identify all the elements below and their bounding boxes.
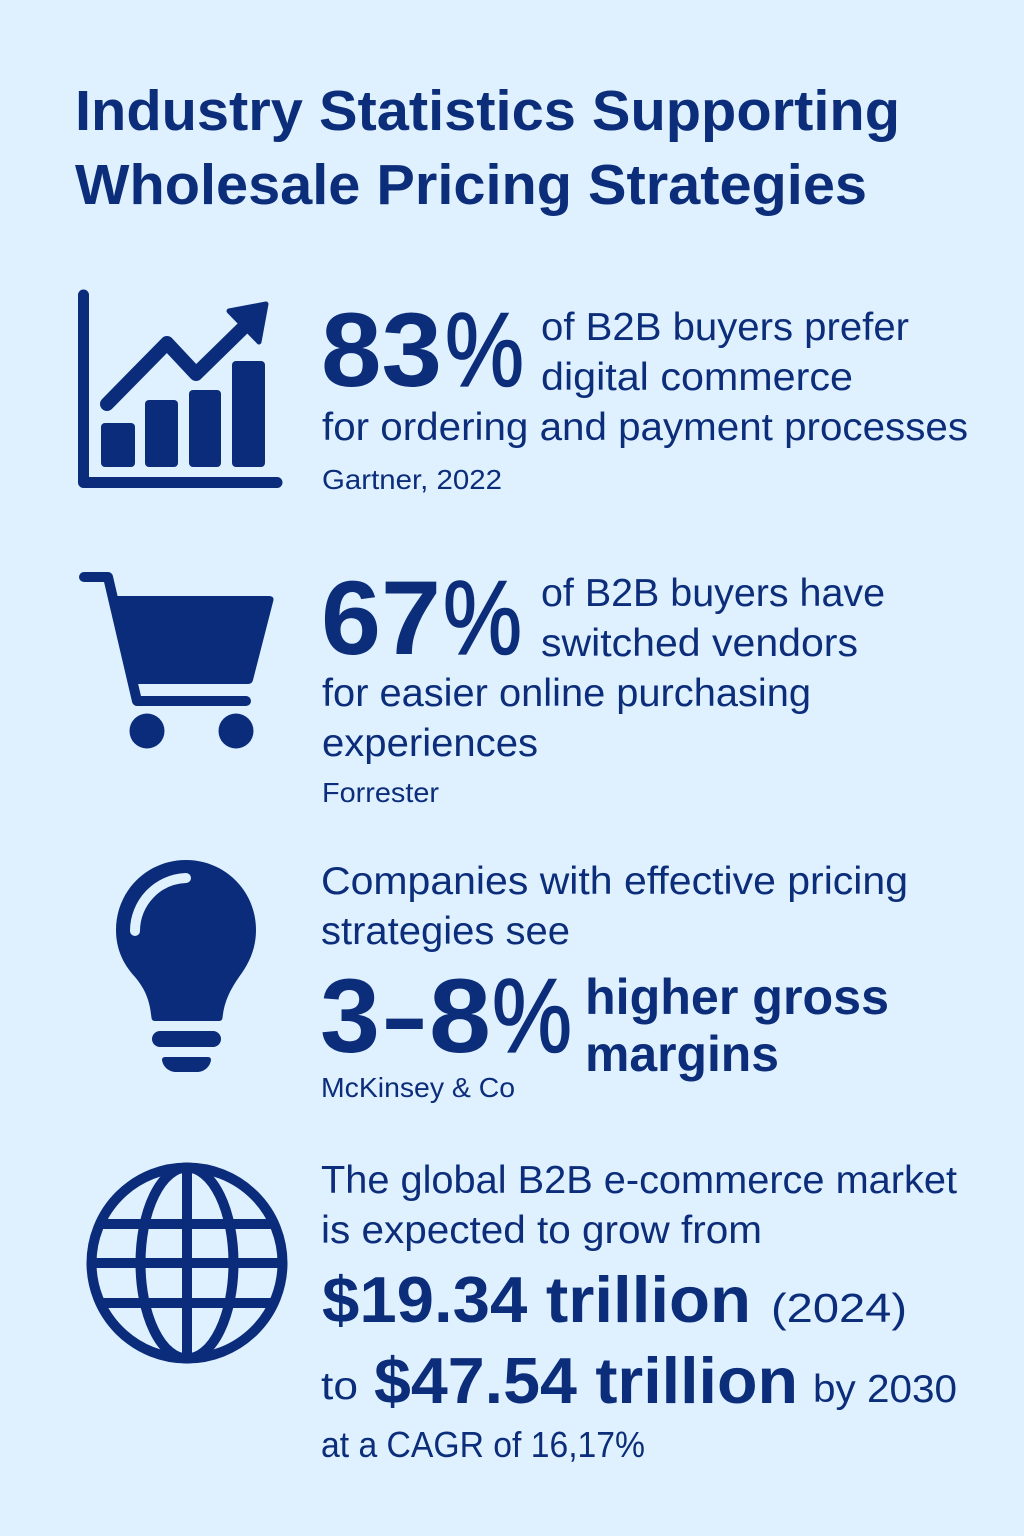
icon: globe [92,1168,282,1358]
statistic: 2030 market size: $47.54 trillion [374,1344,798,1417]
statistic: 2030 market size: to [321,1365,358,1408]
statistic: 83%: % [445,292,524,409]
title [75,79,900,217]
text: digital commerce description: digital commerce [541,356,853,399]
statistic: 3–8%: – [384,958,425,1075]
statistic: 67% [321,560,522,677]
text: market introduction [321,1159,957,1252]
statistic: 3–8%: 3 [320,958,380,1075]
text: digital commerce description: for ordering and payment processes [322,406,968,449]
statistic: 67%: % [443,560,522,677]
panel: vendor switching statistic [84,560,885,808]
text: vendor switching description: experiences [322,722,538,765]
statistic: 3–8%: % [492,958,572,1075]
icon: light bulb [116,860,256,1072]
text: vendor switching description: switched vendors [541,622,858,665]
text: vendor switching description: of B2B buyers have [541,572,885,615]
panel: gross margin statistic [116,860,908,1103]
source: Gartner: Gartner, 2022 [322,464,502,495]
text: higher gross margins: higher gross [585,969,889,1025]
text: vendor switching description [322,572,885,765]
statistic: 3–8% [320,958,572,1075]
statistic: 3–8%: 8 [429,958,491,1075]
panel: global market statistic [92,1159,957,1465]
statistic: 67%: 67 [321,560,441,677]
statistic: 2030 market size: by 2030 [813,1368,957,1411]
text: higher gross margins: margins [585,1026,779,1082]
text: digital commerce description [322,306,968,449]
text: higher gross margins [585,969,889,1082]
text: vendor switching description: for easier online purchasing [322,672,811,715]
panel: digital commerce statistic [84,292,968,495]
text: market introduction: The global B2B e-commerce market [321,1159,957,1202]
icon: shopping cart [84,577,274,748]
icon: rising bar chart [84,295,277,482]
source: Forrester: Forrester [322,777,439,808]
statistic: 2024 market size: (2024) [771,1285,907,1331]
statistic: 2030 market size [321,1344,957,1417]
text: companies with effective pricing: strategies see [321,910,570,953]
statistic: 83% [321,292,524,409]
title: Wholesale Pricing Strategies [75,153,867,217]
text: market introduction: is expected to grow from [321,1209,762,1252]
statistic: 2024 market size: $19.34 trillion [322,1263,751,1336]
text: companies with effective pricing: Companies with effective pricing [321,860,908,903]
text: CAGR: at a CAGR of 16,17% [321,1424,645,1465]
text: digital commerce description: of B2B buyers prefer [541,306,909,349]
source: McKinsey: McKinsey & Co [321,1072,515,1103]
text: companies with effective pricing [321,860,908,953]
title: Industry Statistics Supporting [75,79,900,143]
statistic: 83%: 83 [321,292,442,409]
